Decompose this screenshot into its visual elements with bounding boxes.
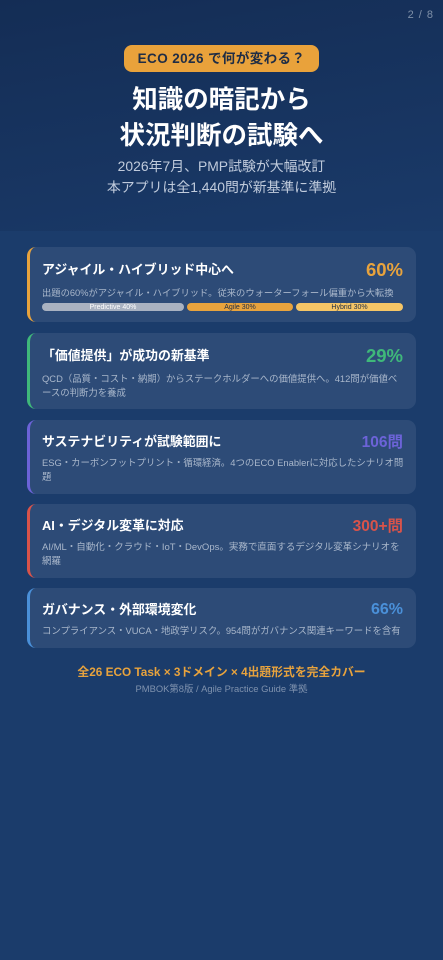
page number: 2 / 8 [408, 9, 434, 21]
footer note: PMBOK第8版 / Agile Practice Guide 準拠 [136, 683, 307, 694]
footer highlight: 全26 ECO Task × 3ドメイン × 4出題形式を完全カバー [77, 665, 366, 679]
title: 状況判断の試験へ [119, 122, 324, 150]
description [42, 457, 403, 482]
segment: agile [187, 303, 293, 311]
card title: AI・デジタル変革に対応 [42, 518, 184, 533]
description: コンプライアンス・VUCA・地政学リスク。954問がガバナンス関連キーワードを含有 [42, 625, 401, 636]
description [42, 373, 397, 398]
segment: hybrid [296, 303, 403, 311]
stat: 300+問 [353, 518, 403, 535]
description: 網羅 [42, 556, 61, 567]
subtitle: 本アプリは全1,440問が新基準に準拠 [107, 179, 336, 195]
segment: agile: Agile 30% [224, 304, 256, 311]
segment: hybrid: Hybrid 30% [331, 304, 368, 311]
subtitle [107, 158, 336, 195]
badge [124, 45, 319, 72]
card title: アジャイル・ハイブリッド中心へ [42, 262, 234, 277]
card: sustainability [27, 420, 416, 494]
description: QCD（品質・コスト・納期）からステークホルダーへの価値提供へ。412問が価値ベ [42, 373, 397, 384]
stat: 66% [371, 601, 403, 618]
card title: サステナビリティが試験範囲に [42, 434, 221, 449]
segment: predictive: Predictive 40% [90, 304, 136, 311]
card: value delivery [27, 333, 416, 409]
header band [0, 0, 443, 231]
description: AI/ML・自動化・クラウド・IoT・DevOps。実務で直面するデジタル変革シナリオを [42, 542, 400, 553]
description: ースの判断力を養成 [42, 387, 126, 398]
description: 題 [42, 471, 51, 482]
card: agile [27, 247, 416, 322]
card: AI and digital [27, 504, 416, 578]
title: 知識の暗記から [132, 86, 311, 114]
description [42, 542, 400, 567]
card title: 「価値提供」が成功の新基準 [42, 348, 210, 363]
description: ESG・カーボンフットプリント・循環経済。4つのECO Enablerに対応したシナリオ問 [42, 457, 403, 468]
title [119, 86, 324, 150]
description: 出題の60%がアジャイル・ハイブリッド。従来のウォーターフォール偏重から大転換 [42, 288, 394, 298]
card title: ガバナンス・外部環境変化 [42, 602, 196, 617]
stat: 106問 [362, 434, 403, 451]
subtitle: 2026年7月、PMP試験が大幅改訂 [118, 158, 325, 174]
card: governance [27, 588, 416, 648]
segment: predictive [42, 303, 184, 311]
stat: 29% [366, 345, 403, 366]
stat: 60% [366, 259, 403, 280]
badge: ECO 2026 で何が変わる？ [138, 51, 305, 66]
stacked bar [42, 303, 403, 311]
